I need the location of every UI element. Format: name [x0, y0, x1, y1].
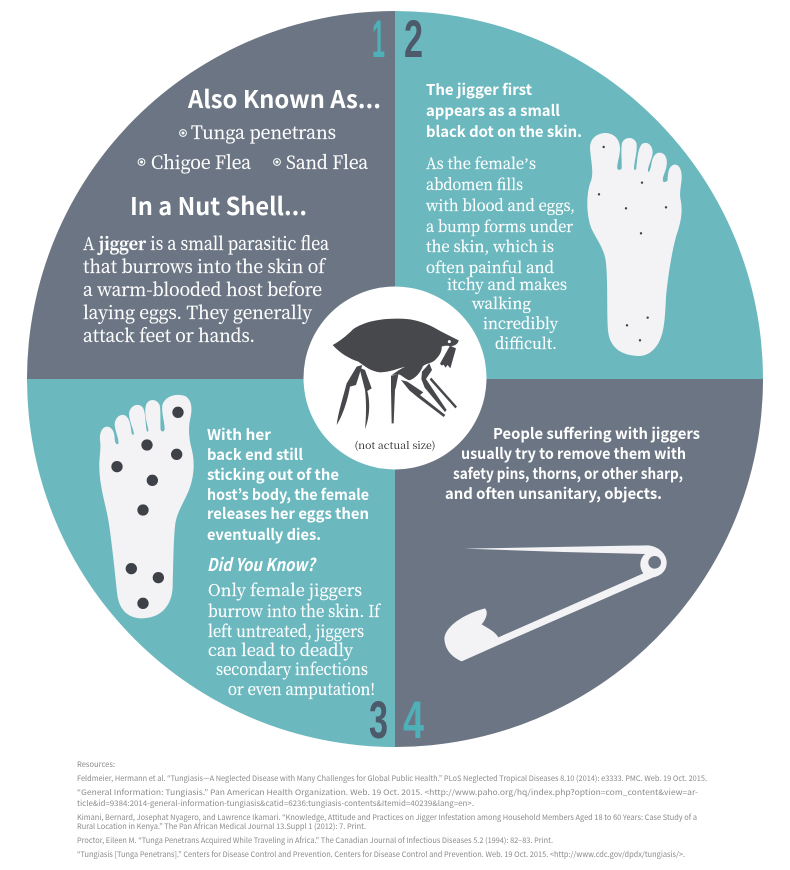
list of alternative names: Sand Flea — [286, 149, 369, 175]
resources list: “Tungiasis [Tunga Penetrans].” Centers for Disease Control and Prevention. Centers for Disease Control and Prevention. Web. 19 Oct. 2015. <http://www.cdc.gov/dpdx/tungiasis/>. — [77, 849, 685, 860]
section 2 bold text: The jigger first — [426, 79, 533, 100]
icon: foot with large dots — [99, 395, 194, 618]
icon: foot with small dots — [587, 133, 682, 356]
section 4 text: usually try to remove them with — [461, 443, 686, 464]
section 2 bold text — [426, 79, 582, 142]
definition paragraph: A jigger is a small parasitic flea — [83, 230, 329, 256]
section 2 body text — [425, 152, 575, 354]
section 3 bold text: eventually dies. — [207, 524, 321, 545]
section 3 bold text: host’s body, the female — [207, 484, 369, 505]
section 2 body text: walking — [471, 292, 531, 314]
center circle with flea — [304, 286, 486, 470]
list of alternative names — [138, 119, 369, 175]
did you know body: burrow into the skin. If — [208, 598, 381, 622]
section number 2: 2 — [404, 10, 423, 69]
section 3 bold text — [207, 424, 369, 545]
section number 3: 3 — [369, 691, 388, 750]
definition paragraph: laying eggs. They generally — [83, 299, 312, 325]
section 3 bold text: back end still — [207, 444, 303, 465]
section 2 body text: difficult. — [495, 332, 557, 354]
did you know body: left untreated, jiggers — [208, 618, 364, 642]
resources list: “General Information: Tungiasis.” Pan American Health Organization. Web. 19 Oct. 2015. <http://www.paho.org/hq/index.php?option=com_content&view=ar- — [77, 787, 698, 798]
section 4 text: People suffering with jiggers — [493, 423, 700, 444]
section 2 body text: the skin, which is — [426, 235, 554, 257]
section 4 text: and often unsanitary, objects. — [445, 483, 662, 504]
section 3 bold text: sticking out of the — [207, 464, 339, 485]
section 2 body text: a bump forms under — [426, 215, 574, 237]
list of alternative names: Chigoe Flea — [151, 149, 252, 175]
section 2 bold text: black dot on the skin. — [426, 121, 582, 142]
section 2 body text: with blood and eggs, — [425, 194, 575, 216]
resources list: Rural Location in Kenya.” The Pan African Medical Journal 13.Suppl 1 (2012): 7. Print. — [77, 821, 366, 832]
resources list: Proctor, Eileen M. “Tunga Penetrans Acquired While Traveling in Africa.” The Canadian Journal of Infectious Diseases 5.2 (1994): 82–83. Print. — [77, 835, 553, 846]
text: 1 — [372, 10, 385, 69]
resources list — [77, 759, 707, 860]
resources list: ticle&id=9384:2014-general-information-tungiasis&catid=6236:tungiasis-contents&Itemid=40239&lang=en>. — [77, 798, 474, 809]
definition paragraph — [83, 230, 329, 348]
did you know body: or even amputation! — [228, 676, 375, 700]
did you know heading: Did You Know? — [207, 552, 318, 577]
section 2 bold text: appears as a small — [426, 100, 560, 121]
section 2 body text: itchy and makes — [447, 273, 567, 295]
resources list: Kimani, Bernard, Josephat Nyagero, and Lawrence Ikamari. “Knowledge, Attitude and Practices on Jigger Infestation among Household Members Aged 18 to 60 Years: Case Study of a — [77, 812, 697, 823]
did you know body — [208, 577, 381, 700]
section 2 body text: As the female’s — [426, 152, 536, 174]
definition paragraph: that burrows into the skin of — [83, 253, 327, 279]
icon: safety pin — [444, 545, 667, 661]
section 4 text — [445, 423, 700, 504]
caption: not actual size: (not actual size) — [354, 437, 436, 452]
list of alternative names: Tunga penetrans — [191, 119, 336, 145]
heading: in a nut shell: In a Nut Shell... — [130, 188, 307, 223]
heading: also known as: Also Known As... — [187, 81, 381, 116]
section number 4: 4 — [403, 691, 424, 750]
section 2 body text: often painful and — [426, 256, 554, 278]
section 3 bold text: releases her eggs then — [207, 503, 369, 524]
section 4 text: safety pins, thorns, or other sharp, — [453, 463, 683, 484]
section 2 body text: incredibly — [483, 312, 558, 334]
icon: flea — [333, 319, 459, 429]
resources list: Feldmeier, Hermann et al. “Tungiasis—A Neglected Disease with Many Challenges for Global Public Health.” PLoS Neglected Tropical Diseases 8.10 (2014): e3333. PMC. Web. 19 Oct. 2015. — [77, 773, 707, 784]
section 3 bold text: With her — [207, 424, 271, 445]
resources list: Resources: — [77, 759, 115, 770]
definition paragraph: a warm-blooded host before — [83, 276, 322, 302]
did you know body: Only female jiggers — [208, 577, 362, 601]
did you know body: can lead to deadly — [208, 637, 354, 661]
circle of four quadrants — [27, 11, 763, 747]
definition paragraph: attack feet or hands. — [83, 322, 255, 348]
section 2 body text: abdomen fills — [426, 173, 523, 195]
did you know body: secondary infections — [216, 656, 368, 680]
